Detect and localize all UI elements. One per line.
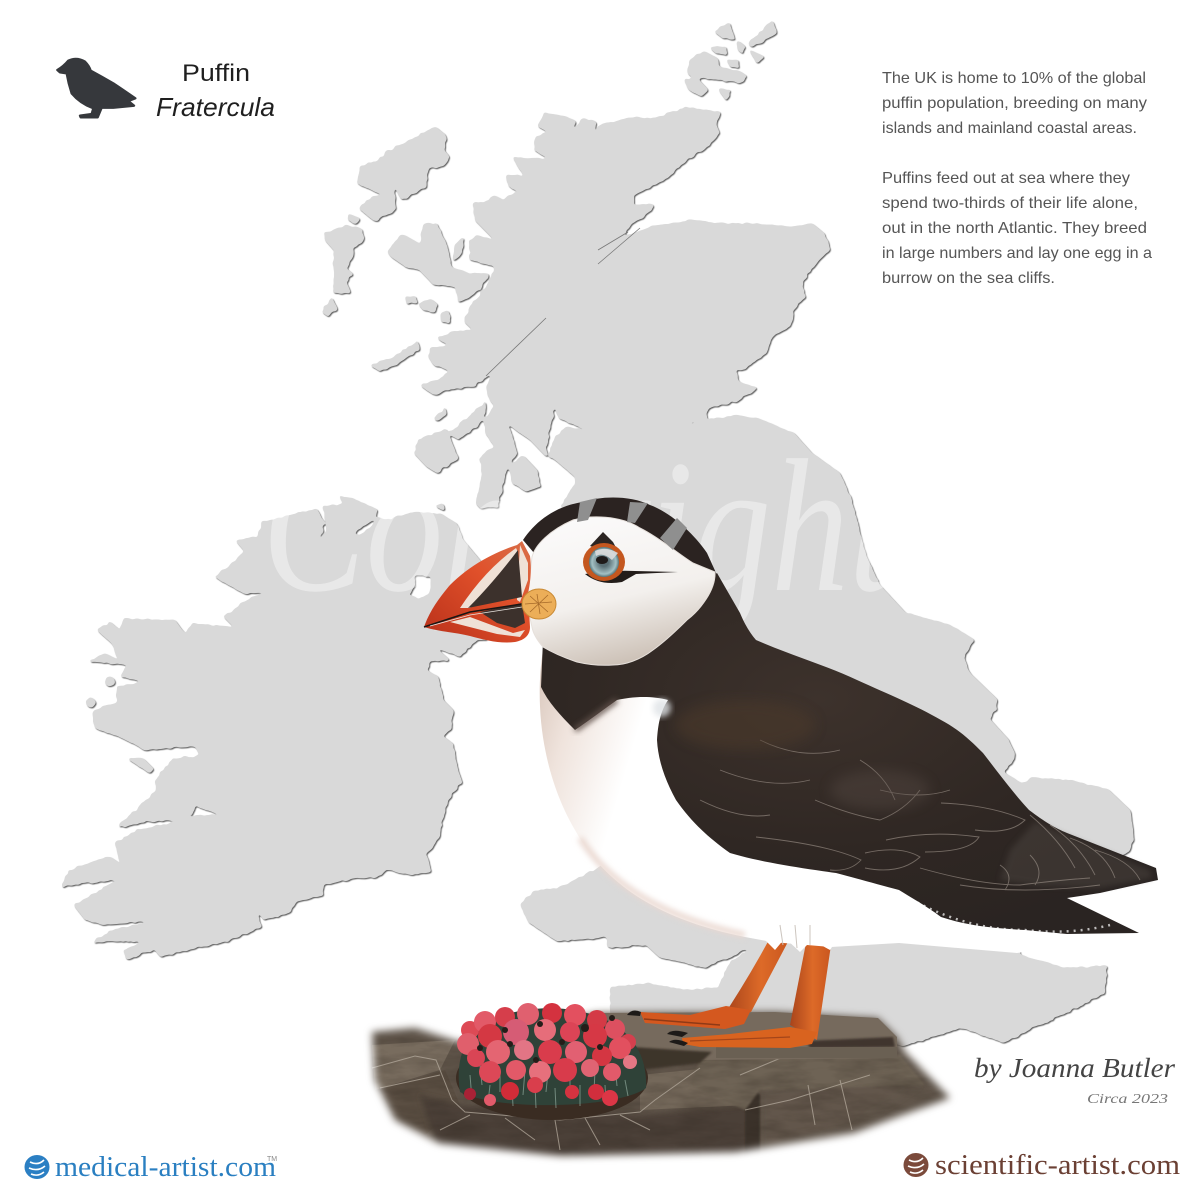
beak slate panel xyxy=(468,550,522,608)
map: Ireland xyxy=(60,495,487,960)
black head cap xyxy=(523,497,717,600)
description text: Puffins feed out at sea where they xyxy=(882,170,1130,187)
dark back, wing and tail xyxy=(541,573,1158,934)
beak xyxy=(424,541,556,643)
ledge band xyxy=(716,1047,897,1058)
medical-artist logo xyxy=(24,1152,277,1183)
rock ledge xyxy=(366,1006,954,1162)
artist name: by Joanna Butler xyxy=(974,1053,1176,1083)
pink flowers xyxy=(457,1003,637,1106)
description text: burrow on the sea cliffs. xyxy=(882,270,1055,287)
white belly and chest xyxy=(540,650,1139,953)
description text: out in the north Atlantic. They breed xyxy=(882,220,1147,237)
grey-brown tail feathers xyxy=(1000,822,1152,888)
lower cream stripe xyxy=(450,617,525,637)
icon: brown badge xyxy=(904,1153,928,1177)
title xyxy=(156,60,275,122)
website name: medical-artist.com xyxy=(55,1152,276,1183)
dried stems xyxy=(470,1065,628,1108)
cap watermark bands xyxy=(577,498,687,550)
ledge hollow xyxy=(632,1047,712,1070)
puffin xyxy=(424,497,1158,1048)
description text xyxy=(882,70,1152,287)
date: Circa 2023 xyxy=(1087,1091,1168,1106)
description text: spend two-thirds of their life alone, xyxy=(882,195,1138,212)
cushion base xyxy=(456,1036,648,1120)
rock body with soft faded edges xyxy=(366,1006,954,1162)
dark eye crescent xyxy=(585,571,678,583)
sea thrift flower cushion xyxy=(456,1003,648,1120)
top slab xyxy=(597,1012,897,1062)
icon: blue badge xyxy=(24,1155,50,1179)
dark gaps among flowers xyxy=(477,1015,615,1063)
under-tail white fringe xyxy=(899,892,1110,932)
beak cream stripe xyxy=(460,548,518,608)
description text: islands and mainland coastal areas. xyxy=(882,120,1137,137)
map: England and Wales xyxy=(520,415,1134,1045)
trademark: TM xyxy=(267,1156,277,1163)
orange eye ring xyxy=(583,543,625,581)
map: Scotland xyxy=(321,20,840,530)
eye highlight xyxy=(595,549,618,560)
scientific name: Fratercula xyxy=(156,92,275,122)
species silhouette icon xyxy=(57,59,135,117)
beak back strip xyxy=(517,545,528,602)
signature xyxy=(974,1053,1176,1106)
great glen and firth lines xyxy=(486,228,640,376)
watermark: Copyright xyxy=(262,422,895,632)
rear leg xyxy=(627,938,790,1029)
thigh feather fringe xyxy=(760,935,840,952)
collar fade into chest xyxy=(575,700,617,730)
description text: puffin population, breeding on many xyxy=(882,95,1147,112)
description text: The UK is home to 10% of the global xyxy=(882,70,1146,87)
white face xyxy=(528,517,715,665)
common name: Puffin xyxy=(182,60,250,87)
lower slate panel xyxy=(480,603,525,628)
scientific-artist logo xyxy=(904,1150,1180,1181)
top slab shading xyxy=(806,1037,895,1048)
gape line xyxy=(424,604,522,627)
foliage xyxy=(459,1008,646,1105)
front leg xyxy=(667,943,831,1048)
website name: scientific-artist.com xyxy=(935,1150,1180,1181)
map of Britain and Ireland xyxy=(60,20,1134,1045)
wing feather details xyxy=(700,740,1140,890)
pink belly shading xyxy=(580,838,745,935)
eye xyxy=(583,532,678,583)
shoulder highlight xyxy=(653,699,671,717)
beak base shape xyxy=(424,541,531,643)
gape rosette xyxy=(522,589,556,619)
pupil xyxy=(596,556,608,564)
iris xyxy=(589,547,619,577)
description text: in large numbers and lay one egg in a xyxy=(882,245,1152,262)
